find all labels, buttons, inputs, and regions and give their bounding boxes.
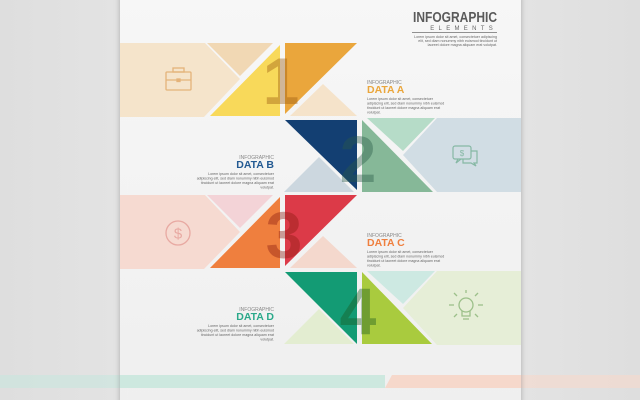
title: INFOGRAPHIC — [413, 10, 497, 26]
row 4 — [284, 271, 521, 348]
text: data D: tincidunt ut laoreet dolore magna aliquam erat — [201, 333, 274, 337]
text: data A: volutpat. — [367, 110, 381, 114]
text: data A — [367, 80, 444, 114]
text: data B: volutpat. — [260, 186, 274, 190]
text: data C: Lorem ipsum dolor sit amet, consectetuer — [367, 250, 434, 254]
icon: lightbulb — [449, 290, 483, 319]
text: data C: volutpat. — [367, 264, 381, 268]
icon: chat bubbles: $ — [460, 149, 465, 158]
row 4: 4 — [340, 274, 377, 348]
row 3 — [120, 195, 357, 272]
icon: briefcase — [166, 68, 191, 90]
row 3: 3 — [266, 198, 302, 272]
text: data A: DATA A — [367, 84, 405, 96]
text: data B: Lorem ipsum dolor sit amet, consectetuer — [208, 172, 275, 176]
panel — [120, 0, 521, 400]
title: Lorem ipsum dolor sit amet, consectetuer adipiscing — [414, 35, 497, 39]
text: data B: DATA B — [236, 159, 274, 171]
row 1 — [120, 43, 357, 118]
text: data C: DATA C — [367, 237, 405, 249]
title: ELEMENTS — [430, 26, 497, 32]
row 2: 2 — [340, 122, 376, 196]
text: data B: INFOGRAPHIC — [239, 155, 274, 161]
icon: chat bubbles — [453, 146, 477, 166]
bottom strip outside — [0, 375, 640, 388]
text: data C — [367, 233, 444, 268]
text: data B: adipiscing elit, sed diam nonummy nibh euismod — [197, 176, 274, 180]
title: laoreet dolore magna aliquam erat volutpat. — [428, 43, 497, 47]
text: data D: DATA D — [236, 311, 274, 323]
title: elit, sed diam nonummy nibh euismod tincidunt ut — [418, 39, 497, 43]
text: data D: adipiscing elit, sed diam nonummy nibh euismod — [197, 328, 274, 332]
row 2 — [284, 118, 521, 196]
title — [412, 10, 497, 47]
icon: dollar circle — [166, 221, 190, 245]
text: data D: Lorem ipsum dolor sit amet, consectetuer — [208, 324, 275, 328]
text: data D: volutpat. — [260, 338, 274, 342]
icon: dollar circle: $ — [174, 226, 183, 242]
text: data C: INFOGRAPHIC — [367, 233, 402, 239]
text: data A: tincidunt ut laoreet dolore magna aliquam erat — [367, 106, 440, 110]
text: data B — [197, 155, 275, 190]
text: data C: tincidunt ut laoreet dolore magna aliquam erat — [367, 259, 440, 263]
text: data D — [197, 307, 275, 342]
text: data A: INFOGRAPHIC — [367, 80, 402, 86]
row 1: 1 — [263, 44, 299, 118]
text: data A: Lorem ipsum dolor sit amet, consectetuer — [367, 97, 434, 101]
text: data B: tincidunt ut laoreet dolore magna aliquam erat — [201, 181, 274, 185]
text: data D: INFOGRAPHIC — [239, 307, 274, 313]
text: data C: adipiscing elit, sed diam nonummy nibh euismod — [367, 254, 444, 258]
text: data A: adipiscing elit, sed diam nonummy nibh euismod — [367, 102, 444, 106]
